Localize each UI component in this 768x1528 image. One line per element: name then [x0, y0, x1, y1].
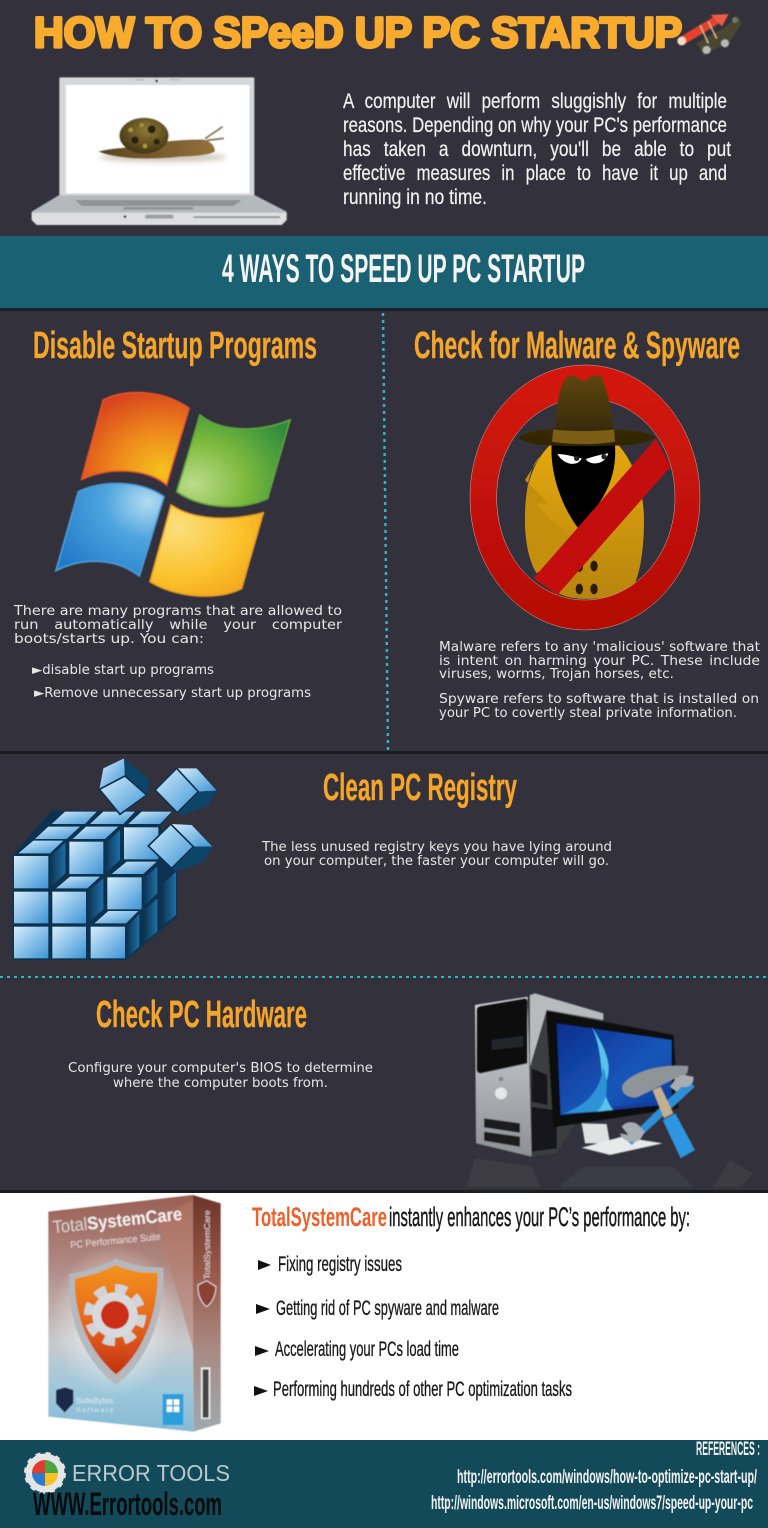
heading: Clean PC Registry [323, 767, 517, 809]
intro paragraph [343, 90, 731, 209]
references [431, 1439, 760, 1514]
image: laptop with snail [32, 77, 287, 225]
body text: viruses, worms, Trojan horses, etc. [439, 667, 674, 682]
bullet list [254, 1253, 572, 1401]
box shield [69, 1258, 163, 1385]
body text [439, 640, 760, 721]
website: WWW.Errortools.com [33, 1486, 222, 1522]
body text [68, 1061, 373, 1091]
intro paragraph: running in no time. [343, 186, 487, 209]
footer [0, 1439, 768, 1528]
logo: error tools gear [26, 1454, 64, 1492]
floating cube 2 [155, 768, 217, 815]
box subtitle: PC Performance Suite [70, 1232, 162, 1251]
body text: where the computer boots from. [113, 1076, 328, 1091]
panel: total system care [0, 1190, 768, 1440]
icon: registry cubes [13, 758, 217, 960]
heading: Disable Startup Programs [33, 325, 317, 367]
panel: check pc hardware [68, 993, 753, 1187]
heading [252, 1202, 690, 1232]
body text [13, 604, 343, 647]
body text: is intent on harming your PC. These include [439, 654, 760, 669]
image: software box [48, 1195, 221, 1432]
body text: boots/starts up. You can: [14, 632, 204, 647]
icon: windows logo [56, 393, 290, 596]
safebytes label: SafeBytes [76, 1395, 114, 1405]
bullet list: Getting rid of PC spyware and malware [276, 1297, 499, 1320]
floating cube 1 [99, 758, 150, 814]
box side name: TotalSystemCare [202, 1210, 212, 1279]
body text: run automatically while your computer [14, 618, 343, 633]
bullet list: Fixing registry issues [278, 1253, 402, 1276]
body text: on your computer, the faster your computer will go. [264, 854, 609, 869]
image: software box: Software [76, 1407, 114, 1414]
icon: rocket arrow on circuit board [677, 14, 742, 55]
icon: spy with no sign [470, 365, 700, 630]
snail [98, 118, 227, 162]
body text: Spyware refers to software that is installed on [439, 692, 759, 707]
body text [261, 840, 612, 869]
panel: clean pc registry [13, 758, 612, 960]
heading: Check PC Hardware [96, 994, 307, 1036]
box name: TotalSystemCare [52, 1204, 183, 1237]
brand name: ERROR TOOLS [72, 1460, 230, 1486]
body text: your PC to covertly steal private information. [439, 706, 737, 721]
title: HOW TO SPeeD UP PC STARTUP [34, 9, 682, 57]
panel: disable startup programs [13, 325, 343, 701]
body text: Configure your computer's BIOS to determine [68, 1061, 373, 1076]
body text: The less unused registry keys you have lying around [261, 840, 612, 855]
panel: malware and spyware [414, 325, 760, 721]
heading: TotalSystemCare [252, 1202, 387, 1232]
body text: Malware refers to any 'malicious' software that [439, 640, 760, 655]
icon: desktop computer and tools [467, 993, 753, 1187]
bullet list [32, 663, 311, 701]
bullet list: Accelerating your PCs load time [275, 1338, 459, 1361]
bullet list: ►disable start up programs [32, 663, 214, 678]
body text: There are many programs that are allowed to [13, 604, 342, 619]
bullet list: ►Remove unnecessary start up programs [34, 686, 311, 701]
floating cube 3 [148, 824, 212, 872]
banner: 4 ways [0, 236, 768, 311]
bullet list: Performing hundreds of other PC optimization tasks [273, 1378, 572, 1401]
